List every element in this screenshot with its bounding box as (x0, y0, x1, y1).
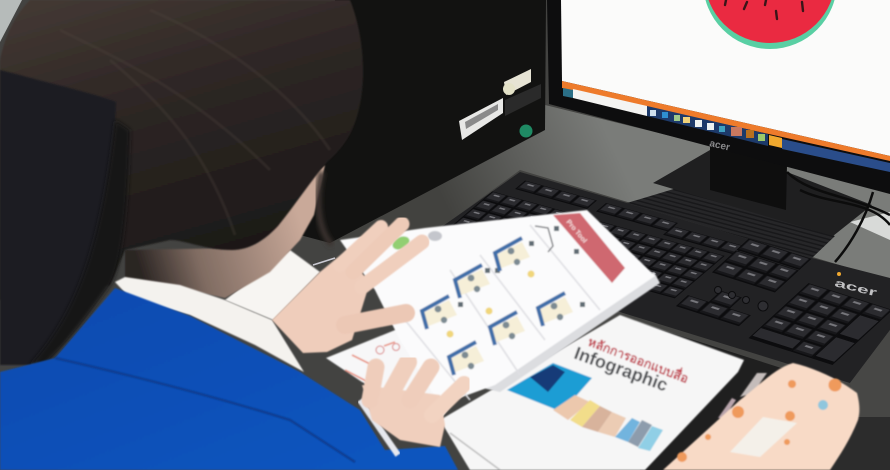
bow shadow (30, 120, 130, 365)
icon: diagram 2 (455, 265, 490, 298)
icon: diagram 5 (538, 293, 573, 326)
upper hand (272, 224, 422, 353)
connector bracket (535, 226, 553, 252)
monitor bezel (547, 0, 890, 194)
lower hand (362, 362, 464, 447)
function keys F5-F8 (596, 203, 678, 232)
grey punch mark (428, 231, 442, 241)
pen on desk (313, 258, 335, 265)
function keys F1-F4 (515, 180, 597, 209)
stand base striped plane (627, 188, 835, 258)
poster thumbnail (507, 363, 592, 412)
black object bottom right (830, 417, 890, 470)
finger 1 (370, 367, 376, 400)
hair (0, 0, 363, 300)
monitor brand: acer (708, 138, 731, 154)
finger 2 (387, 362, 408, 400)
cables (787, 172, 890, 262)
numpad digits (760, 294, 860, 347)
monitor screen (561, 0, 890, 156)
taskbar left (647, 106, 768, 146)
main key block (442, 191, 725, 298)
fanned handout (340, 210, 660, 405)
palm (272, 253, 370, 353)
divider lines (405, 225, 600, 400)
computer tower (300, 0, 546, 243)
neck and cheek (125, 165, 325, 298)
numpad zero key (748, 327, 802, 352)
up arrow key (709, 291, 742, 308)
certification label (503, 69, 541, 116)
lower sheet chart lines (345, 342, 395, 382)
numpad plus key (836, 314, 880, 343)
numpad decimal key (790, 341, 824, 358)
green badge (520, 124, 532, 138)
palm (362, 385, 445, 447)
stand neck (710, 140, 787, 210)
icon: diagram 4 (490, 312, 525, 345)
finger 3 (362, 242, 422, 287)
booklet page (440, 315, 744, 470)
white paper behind cables (850, 212, 890, 240)
hair bow (0, 70, 116, 365)
upper desk surface behind keyboard (330, 105, 890, 280)
banknote strip lower (718, 398, 736, 418)
pencil pouch (663, 363, 859, 470)
finger 3 (410, 367, 431, 400)
colored book illustration (553, 395, 663, 451)
arrow keys row (676, 295, 751, 326)
thumb (345, 313, 406, 325)
dark desk gap near pouch (625, 318, 890, 470)
infographic booklet (440, 315, 744, 470)
Thai heading: หลักการออกแบบสื่อ (586, 333, 691, 386)
person (0, 0, 458, 470)
napkin under hand (225, 250, 320, 320)
main handout page (340, 210, 655, 405)
icon: diagram 3 (495, 238, 530, 271)
pouch fruit prints (677, 378, 842, 462)
numpad enter key (812, 336, 856, 365)
page edge stack (470, 272, 660, 392)
banknote strip upper (740, 373, 767, 397)
lower handout sheet (326, 328, 455, 420)
numpad top row (796, 283, 890, 321)
monitor stand (627, 140, 872, 258)
round media keys (714, 286, 768, 311)
finger 2 (353, 224, 402, 272)
taskbar search box (573, 89, 647, 116)
page stack edge (450, 433, 500, 470)
Infographic heading: Infographic (572, 343, 671, 395)
shirt collar (115, 277, 304, 372)
yellow app square (769, 135, 782, 148)
jacket collar fold shadow (55, 358, 355, 462)
finger 1 (340, 227, 381, 265)
pouch body (663, 363, 859, 470)
barcode sticker (459, 98, 503, 140)
keyboard (440, 172, 890, 383)
print screen row (736, 239, 811, 270)
red heading tab: Pro Tool (564, 219, 588, 245)
small markers (458, 226, 585, 307)
taskbar start button (563, 88, 573, 98)
status light (837, 272, 841, 276)
orange ribbon (562, 81, 890, 161)
pouch blue dot (818, 400, 828, 410)
green tab on page (390, 234, 412, 252)
keyboard body (440, 172, 890, 383)
taskbar right (782, 139, 890, 172)
navigation and numeric keys (668, 239, 890, 365)
taskbar app icons (650, 110, 765, 141)
red heading tab (553, 213, 625, 283)
icon: diagram 1 (422, 296, 457, 329)
thumb (432, 384, 464, 415)
pouch tag (730, 417, 797, 457)
blue jacket (0, 288, 458, 470)
icon: diagram 6 (449, 342, 484, 375)
keyboard brand: acer (833, 277, 879, 300)
stand base top (653, 150, 872, 236)
yellow markers (446, 270, 534, 338)
grey wall corner (0, 0, 22, 42)
poster accent (530, 365, 565, 392)
hair wisps (318, 172, 332, 245)
insert and delete block (712, 250, 799, 292)
watermelon graphic (703, 0, 837, 49)
hair strands (60, 10, 330, 235)
monitor (547, 0, 890, 194)
sleeve cuff (360, 400, 398, 455)
right desk wood (850, 330, 890, 417)
function keys F9-F12 (663, 226, 745, 255)
